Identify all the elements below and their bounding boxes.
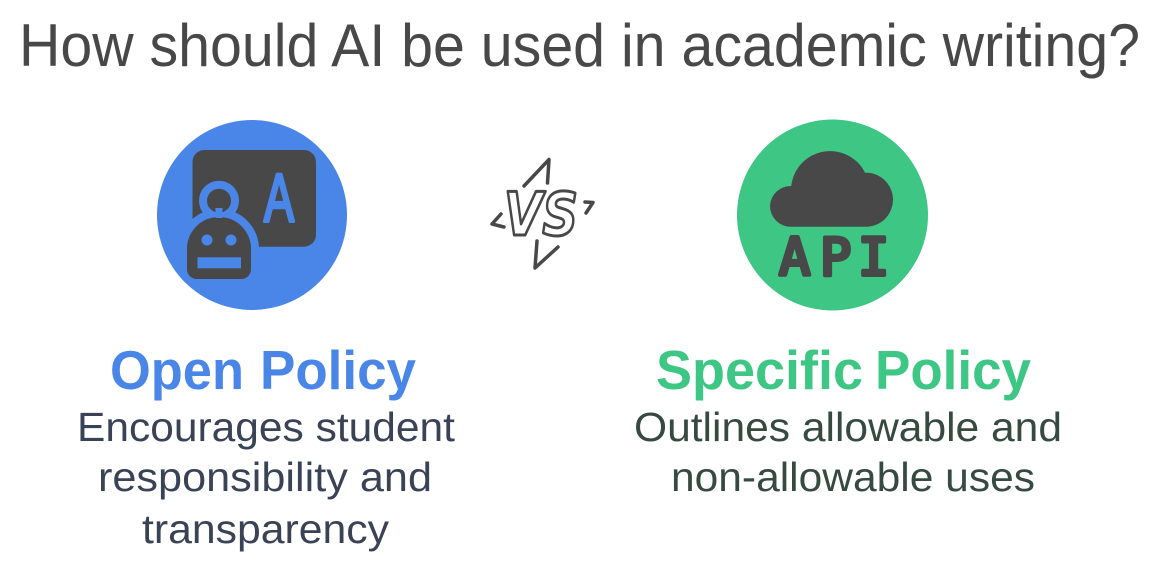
panel: open policy: [77, 120, 456, 552]
icon: robot with letter board: A: [264, 160, 294, 236]
text: open policy description: responsibility and: [98, 454, 432, 500]
icon: cloud API: [737, 120, 928, 310]
icon: cloud API: API: [779, 228, 889, 288]
heading: open policy: Open: [110, 339, 244, 401]
icon: versus badge: [492, 160, 593, 268]
text: specific policy description: non-allowable uses: [671, 454, 1035, 500]
text: specific policy description: [634, 404, 1062, 500]
text: open policy description: transparency: [142, 506, 390, 552]
text: open policy description: Encourages student: [77, 404, 456, 450]
heading: open policy: [110, 339, 416, 401]
heading: specific policy: Policy: [875, 339, 1031, 401]
icon: versus badge: VS: [504, 180, 578, 250]
icon: robot with letter board: [157, 120, 347, 310]
panel: specific policy: [634, 120, 1062, 500]
heading: specific policy: Specific: [656, 339, 863, 401]
heading: specific policy: [656, 339, 1031, 401]
heading: open policy: Policy: [260, 339, 416, 401]
text: open policy description: [77, 404, 456, 552]
text: specific policy description: Outlines allowable and: [634, 404, 1062, 450]
